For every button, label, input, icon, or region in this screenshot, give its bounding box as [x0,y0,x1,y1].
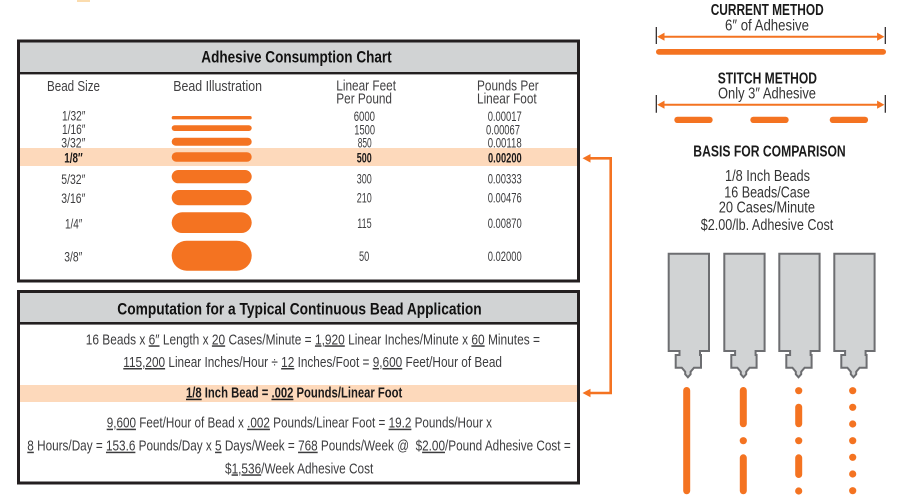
stitch method diagram [656,70,885,123]
icon: nozzle 4 with dots [834,254,875,494]
computation: weekly adhesive cost: 9,600 Feet/Hour of Bead x .002 Pounds/Linear Foot = 19.2 Pounds/Hour x [107,415,492,432]
computation heading band: Computation for a Typical Continuous Bead Application [117,300,482,318]
arrow: connector between highlighted rows [582,154,611,397]
column headers: Bead Size [47,79,100,95]
chart heading band: Adhesive Consumption Chart [201,49,392,67]
basis for comparison text [693,144,846,234]
bead size column: 1/16″ [62,122,85,137]
bead illustrations [172,116,252,271]
current method diagram: CURRENT METHOD [711,2,824,19]
highlighted row: pounds per linear foot [20,385,577,402]
computation: feet per hour: 115,200 Linear Inches/Hour ÷ 12 Inches/Foot = 9,600 Feet/Hour of Bead [123,354,502,371]
column headers: Linear Foot [477,92,537,108]
highlighted row: 1/8 inch [20,148,577,166]
column headers: Bead Illustration [173,79,262,95]
panel: adhesive consumption chart [18,41,578,281]
dimension arrow: 6 inches [656,27,885,44]
linear feet per pound column: 50 [359,249,369,264]
icon: nozzle 1 with continuous bead [669,254,709,494]
computation: weekly adhesive cost [27,415,571,477]
basis for comparison text: BASIS FOR COMPARISON [693,144,846,161]
bead size column [61,109,85,264]
basis for comparison text: $2.00/lb. Adhesive Cost [701,217,834,234]
pounds per linear foot column: 0.00067 [486,122,520,137]
pounds per linear foot column: 0.02000 [488,249,522,264]
linear feet per pound column: 1500 [354,122,375,137]
icon: nozzle 3 with short stitches [779,254,820,495]
pounds per linear foot column: 0.00476 [488,191,522,206]
basis for comparison text: 20 Cases/Minute [719,200,815,217]
computation heading band [20,293,577,325]
stitch method diagram: STITCH METHOD [718,70,817,87]
linear feet per pound column: 850 [358,136,372,151]
bead size column: 3/32″ [61,136,85,151]
stitched beads [674,117,868,123]
panel: computation for a typical continuous bead application [18,292,578,483]
chart heading band [20,42,577,74]
pounds per linear foot column: 0.00017 [488,109,522,124]
dimension arrow: 3 inches [656,95,885,113]
computation: feet per hour [86,331,540,371]
basis for comparison text: 16 Beads/Case [724,184,810,201]
bead size column: 3/16″ [61,191,85,206]
bead size column: 1/4″ [65,216,82,231]
linear feet per pound column [354,109,375,264]
computation: weekly adhesive cost: 8 Hours/Day = 153.6 Pounds/Day x 5 Days/Week = 768 Pounds/Week @ $2.00/Pound Adhesive Cost = [27,438,571,455]
icon: nozzle 2 with long stitches [724,254,765,494]
column headers: Per Pound [336,92,392,108]
continuous bead [656,49,886,55]
pounds per linear foot column: 0.00870 [488,216,522,231]
bead size column: 1/8″ [64,150,83,166]
current method diagram [656,2,886,55]
bead size column: 5/32″ [61,172,85,187]
bead size column: 3/8″ [64,249,82,264]
linear feet per pound column: 210 [357,191,372,206]
basis for comparison text: 1/8 Inch Beads [725,168,810,185]
linear feet per pound column: 300 [357,172,372,187]
pounds per linear foot column [486,109,522,264]
computation: feet per hour: 16 Beads x 6″ Length x 20 Cases/Minute = 1,920 Linear Inches/Minute x 60 Minutes = [86,331,540,348]
stitch method diagram: Only 3″ Adhesive [718,86,816,103]
current method diagram: 6″ of Adhesive [725,18,809,35]
column headers: Linear Feet [336,79,396,95]
pounds per linear foot column: 0.00200 [488,150,522,165]
computation: weekly adhesive cost: $1,536/Week Adhesive Cost [225,460,374,477]
pounds per linear foot column: 0.00333 [488,172,522,187]
column headers: Pounds Per [477,79,539,95]
pounds per linear foot column: 0.00118 [488,136,522,151]
column headers [47,79,539,108]
linear feet per pound column: 6000 [354,109,375,124]
highlighted row: pounds per linear foot: 1/8 Inch Bead = .002 Pounds/Linear Foot [186,385,402,402]
bead size column: 1/32″ [62,109,85,124]
linear feet per pound column: 500 [357,150,372,165]
linear feet per pound column: 115 [357,216,372,231]
